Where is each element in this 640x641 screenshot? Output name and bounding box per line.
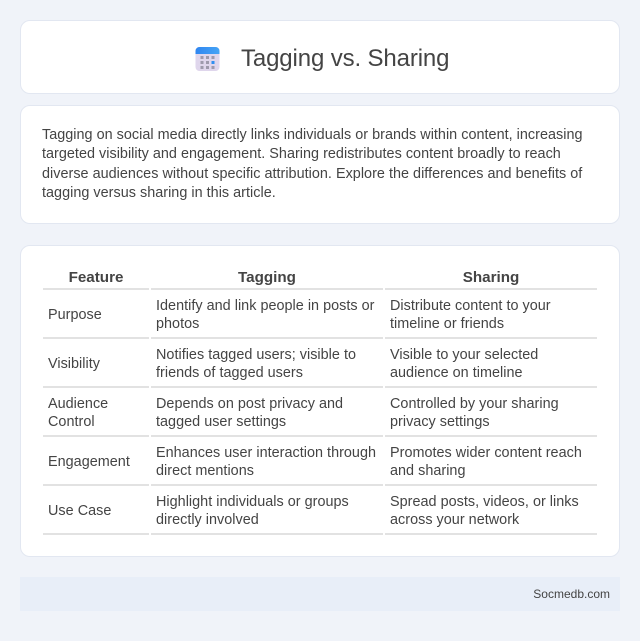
row: Engagement: [48, 445, 582, 479]
row: Use Case: Highlight individuals or groups: [156, 494, 349, 510]
row: Audience Control: Controlled by your sharing: [390, 396, 559, 412]
text block: intro: diverse audiences without specific attribution. Explore the differences and benefits of: [42, 166, 582, 182]
row: Visibility: Visible to your selected: [390, 347, 538, 363]
row: Purpose: Purpose: [48, 307, 102, 323]
row: Use Case: Use Case: [48, 503, 111, 519]
row: Engagement: Promotes wider content reach: [390, 445, 582, 461]
row: Audience Control: Control: [48, 414, 95, 430]
panel: title card: [20, 20, 620, 94]
panel: introduction: [20, 105, 620, 224]
row: Audience Control: Audience: [48, 396, 108, 412]
text block: intro: targeted visibility and engagement. Sharing redistributes content broadly to reach: [42, 146, 561, 162]
row: Engagement: direct mentions: [156, 463, 254, 479]
text block: intro: Tagging on social media directly links individuals or brands within content, increasing: [42, 127, 583, 143]
row: Audience Control: [48, 396, 559, 430]
text block: intro: [42, 127, 583, 201]
table header: Sharing: Sharing: [463, 269, 519, 286]
text block: intro: tagging versus sharing in this article.: [42, 185, 276, 201]
row: Engagement: Engagement: [48, 454, 130, 470]
row: Audience Control: Depends on post privacy and: [156, 396, 343, 412]
row: Purpose: [48, 298, 551, 332]
row: Purpose: photos: [156, 316, 199, 332]
row: Visibility: audience on timeline: [390, 365, 523, 381]
row: Use Case: across your network: [390, 512, 519, 528]
row: Purpose: Distribute content to your: [390, 298, 551, 314]
row: Purpose: timeline or friends: [390, 316, 504, 332]
row: Visibility: [48, 347, 538, 381]
row: Use Case: directly involved: [156, 512, 259, 528]
footer text: source: Socmedb.com: [533, 587, 610, 601]
title: Tagging vs. Sharing: [241, 45, 449, 72]
row: Visibility: friends of tagged users: [156, 365, 303, 381]
row: Engagement: and sharing: [390, 463, 465, 479]
panel: footer: [20, 577, 620, 611]
icon: calendar: [196, 47, 220, 71]
table header: Tagging: Tagging: [238, 269, 296, 286]
panel: comparison table card: [20, 245, 620, 557]
row: Purpose: Identify and link people in posts or: [156, 298, 374, 314]
row: Engagement: Enhances user interaction through: [156, 445, 376, 461]
row: Audience Control: privacy settings: [390, 414, 490, 430]
row: Audience Control: tagged user settings: [156, 414, 286, 430]
row: Visibility: Visibility: [48, 356, 100, 372]
row: Visibility: Notifies tagged users; visible to: [156, 347, 356, 363]
row: Use Case: [48, 494, 579, 528]
row: Use Case: Spread posts, videos, or links: [390, 494, 579, 510]
table header: Feature: Feature: [69, 269, 123, 286]
